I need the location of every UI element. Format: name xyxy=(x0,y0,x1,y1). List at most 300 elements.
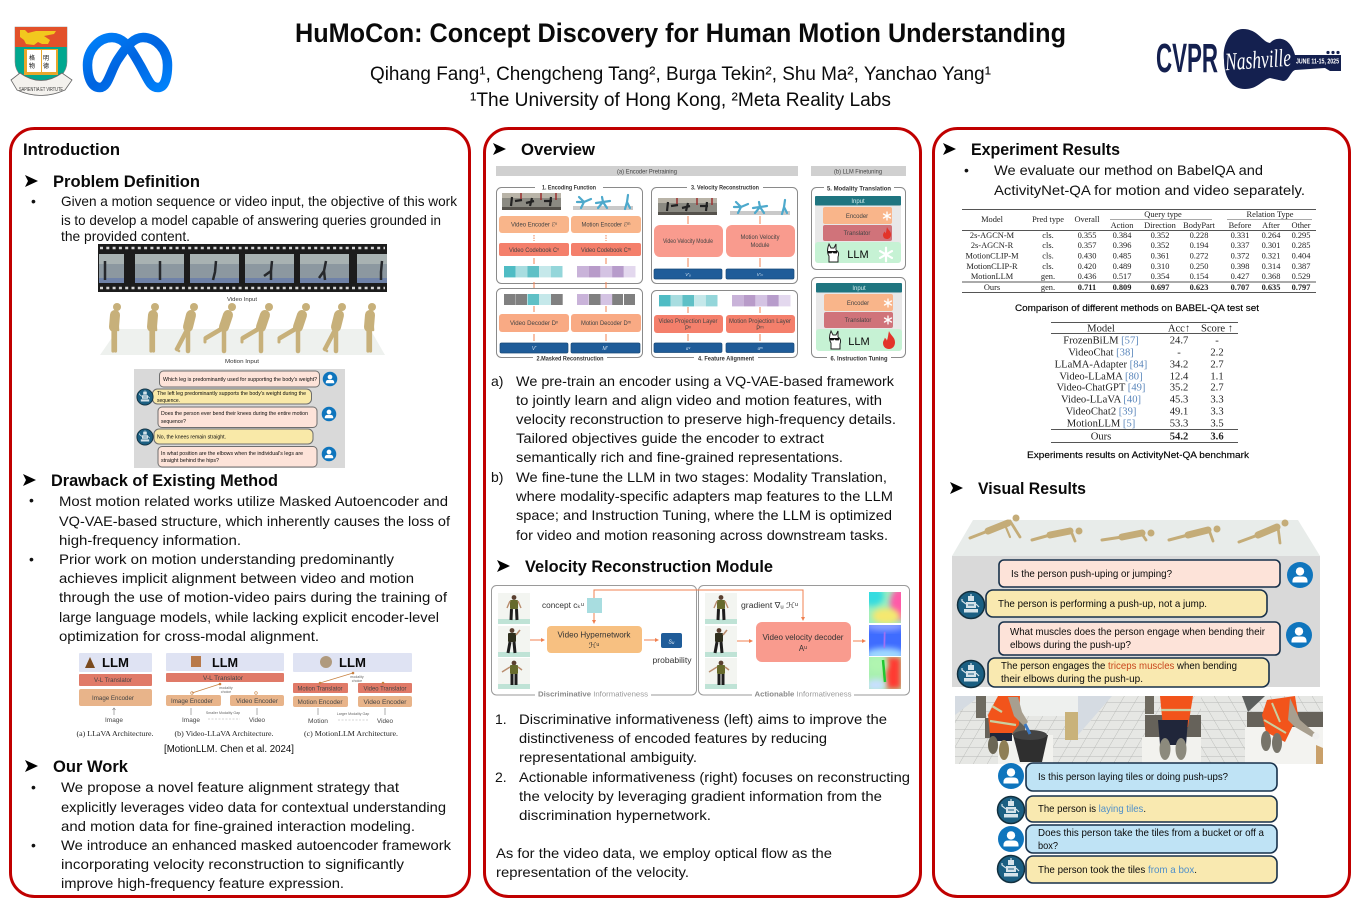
table: BABEL-QA comparison: 0.321 xyxy=(1262,252,1280,260)
table: BABEL-QA comparison: 0.623 xyxy=(1190,283,1208,292)
chat bubble: question 2: elbows during the push-up? xyxy=(1010,639,1131,651)
figure: architecture comparison xyxy=(76,653,412,738)
box: feature alignment xyxy=(652,290,798,362)
panel: overview xyxy=(484,128,920,896)
table: BABEL-QA comparison: Model xyxy=(981,215,1004,224)
text: our work: We propose a novel feature alignment strategy that xyxy=(61,779,399,795)
table: ActivityNet-QA results: 3.3 xyxy=(1210,394,1224,406)
heading: introduction: Introduction xyxy=(23,141,120,159)
text: our work: incorporating velocity reconstruction to significantly xyxy=(61,856,404,872)
table: BABEL-QA comparison: gen. xyxy=(1041,283,1055,292)
diagram: LLaVA architecture xyxy=(76,653,154,738)
text: problem definition: the provided content. xyxy=(61,228,190,244)
panel: introduction xyxy=(10,128,470,896)
table: BABEL-QA comparison: Query type xyxy=(1144,210,1182,219)
panel frame xyxy=(10,128,470,896)
table: ActivityNet-QA results: 2.7 xyxy=(1210,360,1224,370)
figure: motion Q&A chat: sequence. xyxy=(157,398,180,404)
text: drawbacks: optimization for cross-modal alignment. xyxy=(59,628,319,644)
box: feature alignment: Pᵐ xyxy=(756,326,764,332)
table: ActivityNet-QA results: 34.2 xyxy=(1170,360,1188,370)
icon: robot xyxy=(958,660,984,688)
box: instruction tuning: 6. Instruction Tuning xyxy=(830,356,888,362)
chat bubble: question 2: What muscles does the person engage when bending their xyxy=(1010,626,1265,638)
table: ActivityNet-QA results: 3.6 xyxy=(1210,432,1224,442)
table: ActivityNet-QA results: FrozenBiLM [57] xyxy=(1063,336,1139,346)
text: drawbacks: achieves implicit alignment between video and motion xyxy=(59,570,414,586)
header: LLM finetuning: (b) LLM Finetuning xyxy=(834,170,882,176)
table: ActivityNet-QA results: 24.7 xyxy=(1170,336,1188,346)
table: ActivityNet-QA results: Score ↑ xyxy=(1201,324,1233,334)
box: masked reconstruction: V′ xyxy=(532,346,537,352)
text: problem definition xyxy=(31,193,458,244)
header: LLM finetuning xyxy=(811,166,906,176)
diagram: Video-LLaVA architecture: modality xyxy=(219,686,233,690)
box: velocity reconstruction: 3. Velocity Reconstruction xyxy=(691,186,759,192)
diagram: MotionLLM architecture: choice xyxy=(352,679,362,683)
box: encoding function: Motion Encoder ℰᵐ xyxy=(582,222,631,228)
affiliations: ¹The University of Hong Kong, ²Meta Reality Labs xyxy=(470,90,891,111)
text: drawbacks: large language models, while lacking explicit encoder-level xyxy=(59,609,439,625)
text: our work: • xyxy=(31,837,36,853)
text: problem definition: • xyxy=(31,193,36,209)
text: drawbacks: high-frequency information. xyxy=(59,532,241,548)
table: BABEL-QA comparison: cls. xyxy=(1042,262,1054,271)
logo: HKU crest: 格 xyxy=(29,53,35,62)
box: modality translation xyxy=(812,185,906,270)
box: feature alignment: αᵛ xyxy=(686,346,690,351)
figure: video QA example xyxy=(955,696,1323,883)
diagram: MotionLLM architecture: Video Translator xyxy=(364,686,406,692)
box: feature alignment: Motion Projection Layer xyxy=(729,319,791,325)
diagram: Video-LLaVA architecture: LLM xyxy=(212,655,238,670)
box: velocity reconstruction: Module xyxy=(750,243,770,249)
table: BABEL-QA comparison: 0.529 xyxy=(1292,272,1310,281)
table: ActivityNet-QA results: LLaMA-Adapter [84] xyxy=(1055,360,1147,370)
diagram: LLaVA architecture: Image Encoder xyxy=(92,696,134,702)
table: BABEL-QA comparison: Other xyxy=(1291,221,1311,230)
diagram: LLaVA architecture: Image xyxy=(105,718,124,724)
text: numbered explanation: discrimination hypernetwork. xyxy=(519,807,711,823)
table: ActivityNet-QA results: MotionLLM [5] xyxy=(1067,418,1135,430)
diagram: MotionLLM architecture: Motion Translator xyxy=(298,686,342,692)
diagram: Video-LLaVA architecture: Image Encoder xyxy=(171,699,213,705)
box: actionable informativeness: Aᵘ xyxy=(799,644,807,653)
table: ActivityNet-QA results xyxy=(1051,322,1238,442)
box: feature alignment: Video Projection Layer xyxy=(658,319,718,325)
box: feature alignment: 4. Feature Alignment xyxy=(698,356,754,362)
box: masked reconstruction: 2.Masked Reconstruction xyxy=(536,356,604,362)
table: BABEL-QA comparison: 0.285 xyxy=(1292,241,1310,250)
text: overview b xyxy=(491,469,893,543)
header: encoder pretraining xyxy=(496,166,798,176)
box: actionable informativeness: Actionable Informativeness xyxy=(754,692,852,698)
text: numbered explanation: 1. xyxy=(495,711,507,727)
text: overview b: b) xyxy=(491,469,503,485)
authors: Qihang Fang¹, Chengcheng Tang², Burga Tekin², Shu Ma², Yanchao Yang¹ xyxy=(370,64,991,85)
text: our work: and motion data for fine-grained interaction modeling. xyxy=(61,818,415,834)
image: worker frame 1 xyxy=(955,696,1078,764)
label: video input: Video Input xyxy=(227,297,257,303)
icon: robot xyxy=(998,796,1024,824)
label: motion input: Motion Input xyxy=(225,359,259,365)
figure: motion Q&A chat xyxy=(134,369,345,468)
text: our work: improve high-frequency feature expression. xyxy=(61,875,344,891)
table: ActivityNet-QA results: 45.3 xyxy=(1170,394,1188,406)
text: overview b: for video and motion reasoning across downstream tasks. xyxy=(516,527,888,543)
table: ActivityNet-QA results: 12.4 xyxy=(1170,372,1189,382)
arrows: encoding to reconstruction xyxy=(534,282,606,292)
text: drawbacks: Most motion related works utilize Masked Autoencoder and xyxy=(59,493,448,509)
table: BABEL-QA comparison: 2s-AGCN-M xyxy=(970,231,1015,240)
table: BABEL-QA comparison: cls. xyxy=(1042,252,1054,260)
table: ActivityNet-QA results: - xyxy=(1177,348,1181,358)
box: velocity reconstruction: V′ₘ xyxy=(757,272,764,277)
heading: velocity reconstruction module: Velocity Reconstruction Module xyxy=(525,558,773,576)
text: numbered explanation: the velocity by leveraging gradient information from the xyxy=(519,788,882,804)
table: BABEL-QA comparison: 0.396 xyxy=(1113,241,1131,250)
chat bubble: question 1 xyxy=(1026,763,1277,791)
table: ActivityNet-QA results: 35.2 xyxy=(1170,382,1188,394)
diagram: MotionLLM architecture: LLM xyxy=(339,655,366,670)
table: BABEL-QA comparison: Action xyxy=(1111,221,1134,230)
icon: user xyxy=(1287,562,1313,588)
text: problem definition: is to develop a model capable of answering queries grounded in xyxy=(61,212,441,228)
box: masked reconstruction: M′ xyxy=(602,346,609,352)
table: ActivityNet-QA results: VideoChat [38] xyxy=(1068,348,1134,358)
figure: motion Q&A chat: sequence? xyxy=(161,419,186,425)
table: ActivityNet-QA results: VideoChat2 [39] xyxy=(1066,406,1136,418)
text: overview b: where modality-specific adapters map features to the LLM xyxy=(515,488,893,504)
diagram: Video-LLaVA architecture: Image xyxy=(182,718,201,724)
text: overview a: a) xyxy=(491,373,503,389)
table: BABEL-QA comparison: 0.228 xyxy=(1190,231,1208,240)
box: encoding function xyxy=(496,184,642,284)
image: worker frame 3 xyxy=(1201,696,1323,764)
figure: motion Q&A chat: The left leg predominantly supports the body's weight during the xyxy=(157,391,306,397)
box: instruction tuning: LLM xyxy=(848,336,870,348)
panel: experiment results xyxy=(934,128,1350,896)
table: ActivityNet-QA results: 3.3 xyxy=(1210,406,1224,418)
figure: motion Q&A chat: No, the knees remain straight. xyxy=(157,434,226,440)
chat bubble: question 2 xyxy=(999,622,1280,655)
text: overview a: Tailored objectives guide the encoder to extract xyxy=(516,430,824,446)
diagram: LLaVA architecture: (a) LLaVA Architecture. xyxy=(76,730,154,738)
heading: drawback of existing method: Drawback of Existing Method xyxy=(51,472,278,490)
table: BABEL-QA comparison: 0.361 xyxy=(1151,252,1169,260)
figure: video input film strip xyxy=(98,244,387,292)
table: BABEL-QA comparison: MotionCLIP-R xyxy=(966,262,1018,271)
figure: motion Q&A chat: Does the person ever bend their knees during the entire motion xyxy=(161,411,308,417)
table: ActivityNet-QA results: 2.7 xyxy=(1210,382,1224,394)
box: instruction tuning: Input xyxy=(852,286,866,292)
table: BABEL-QA comparison: 0.154 xyxy=(1190,272,1209,281)
heading: overview: Overview xyxy=(521,141,595,159)
box: modality translation: Translator xyxy=(844,231,870,237)
table: BABEL-QA comparison: 0.314 xyxy=(1262,262,1281,271)
figure: motion Q&A chat: Which leg is predominantly used for supporting the body's weight? xyxy=(163,377,317,383)
diagram: Video-LLaVA architecture: (b) Video-LLaVA Architecture. xyxy=(174,730,274,738)
box: encoding function: Video Codebook Cᵐ xyxy=(581,248,632,254)
chat bubble: question 1 xyxy=(999,560,1280,587)
table: ActivityNet-QA results: 54.2 xyxy=(1170,432,1188,442)
box: discriminative informativeness: Discriminative Informativeness xyxy=(538,692,649,698)
box: instruction tuning: Encoder xyxy=(847,301,869,307)
text: overview b: space; and Instruction Tuning, where the LLM is optimized xyxy=(516,507,892,523)
title: HuMoCon: Concept Discovery for Human Motion Understanding xyxy=(295,18,1066,48)
table: BABEL-QA comparison: 0.485 xyxy=(1113,252,1131,260)
text: evaluation summary: • xyxy=(964,162,969,178)
text: drawbacks: through the use of motion-video pairs during the training of xyxy=(59,589,447,605)
box: discriminative informativeness: ℋᵘ xyxy=(589,641,599,650)
diagram: Video-LLaVA architecture xyxy=(166,653,284,738)
logo: CVPR Nashville: JUNE 11-15, 2025 xyxy=(1296,58,1339,66)
diagram: Video-LLaVA architecture: Video xyxy=(249,718,266,724)
text: overview a: velocity reconstruction to preserve high-frequency details. xyxy=(516,411,896,427)
table: BABEL-QA comparison: 0.697 xyxy=(1151,283,1169,292)
text: overview a: semantically rich and fine-grained representations. xyxy=(516,449,843,465)
chat bubble: answer 2: The person engages the triceps muscles when bending xyxy=(1001,660,1237,672)
table: ActivityNet-QA results: - xyxy=(1215,336,1219,346)
heading: visual results: Visual Results xyxy=(978,480,1086,498)
table: BABEL-QA comparison: 0.352 xyxy=(1151,241,1169,250)
table: BABEL-QA comparison: 0.427 xyxy=(1231,272,1249,281)
image: optical flow 3 xyxy=(869,657,901,689)
logo: CVPR Nashville: Nashville xyxy=(1223,45,1292,76)
text: numbered explanation: distinctiveness of encoded features by reducing xyxy=(519,730,827,746)
image: push-up motion sequence xyxy=(952,514,1320,556)
box: masked reconstruction xyxy=(496,288,642,362)
table: BABEL-QA comparison: 0.797 xyxy=(1292,283,1310,292)
diagram: Video-LLaVA architecture: Video Encoder xyxy=(236,699,278,705)
table: BABEL-QA comparison: 0.436 xyxy=(1078,272,1096,281)
table: ActivityNet-QA results: 49.1 xyxy=(1170,406,1188,418)
text: drawbacks: • xyxy=(29,551,34,567)
box: actionable informativeness xyxy=(698,586,910,698)
table: BABEL-QA comparison: 0.372 xyxy=(1231,252,1249,260)
image: worker frame 2 xyxy=(1078,696,1201,764)
table: ActivityNet-QA results: Video-LLaMA [80] xyxy=(1059,372,1143,382)
text: numbered explanation xyxy=(495,711,910,823)
icon: user xyxy=(998,826,1024,852)
box: feature alignment: Pᵛ xyxy=(685,326,691,332)
text: drawbacks: Prior work on motion understanding predominantly xyxy=(59,551,394,567)
panel frame xyxy=(484,128,920,896)
icon: robot xyxy=(998,856,1024,882)
chat bubble: answer 1: The person is performing a push-up, not a jump. xyxy=(998,598,1207,610)
diagram: MotionLLM architecture xyxy=(293,653,412,738)
box: actionable informativeness: gradient ∇ᵤ ℋᵘ xyxy=(741,601,798,610)
diagram: MotionLLM architecture: modality xyxy=(350,675,364,679)
logo: HKU crest: 物 xyxy=(29,61,35,70)
box: discriminative informativeness: Video Hypernetwork xyxy=(558,630,631,640)
box: modality translation: LLM xyxy=(847,249,869,261)
caption: table 2: Experiments results on ActivityNet-QA benchmark xyxy=(1027,449,1249,460)
box: velocity reconstruction xyxy=(652,184,798,284)
text: problem definition: Given a motion sequence or video input, the objective of this work xyxy=(61,193,458,209)
table: ActivityNet-QA results: Video-LLaVA [40] xyxy=(1061,394,1141,406)
text: video data note xyxy=(496,845,832,880)
table: ActivityNet-QA results: 3.5 xyxy=(1210,418,1224,430)
image: optical flow 1 xyxy=(869,592,901,623)
table: BABEL-QA comparison: 0.635 xyxy=(1262,283,1280,292)
chat bubble: answer 2: The person took the tiles from a box. xyxy=(1038,864,1197,876)
diagram: MotionLLM architecture: Larger Modality Gap xyxy=(337,712,369,716)
figure: framework diagram xyxy=(496,166,906,362)
table: BABEL-QA comparison: Direction xyxy=(1144,221,1177,230)
table: BABEL-QA comparison: 0.368 xyxy=(1262,272,1280,281)
icon: user xyxy=(1286,622,1312,648)
table: BABEL-QA comparison: MotionCLIP-M xyxy=(965,252,1019,260)
table: BABEL-QA comparison: 0.384 xyxy=(1113,231,1132,240)
table: ActivityNet-QA results: 53.3 xyxy=(1170,418,1188,430)
logo: HKU crest: 德 xyxy=(43,61,49,70)
table: BABEL-QA comparison: 0.250 xyxy=(1190,262,1208,271)
diagram: MotionLLM architecture: Video Encoder xyxy=(364,700,406,706)
box: discriminative informativeness: sᵤ xyxy=(669,638,675,646)
text: evaluation summary: ActivityNet-QA for motion and video separately. xyxy=(994,182,1305,198)
table: BABEL-QA comparison: Pred type xyxy=(1032,215,1064,224)
table: BABEL-QA comparison: cls. xyxy=(1042,241,1054,250)
table: BABEL-QA comparison: 0.337 xyxy=(1231,241,1249,250)
logo: Meta xyxy=(88,38,168,88)
table: BABEL-QA comparison: 2s-AGCN-R xyxy=(971,241,1014,250)
box: velocity reconstruction: Motion Velocity xyxy=(740,235,780,241)
box: modality translation: Encoder xyxy=(846,214,868,220)
table: BABEL-QA comparison: Before xyxy=(1229,221,1252,230)
box: encoding function: 1. Encoding Function xyxy=(542,186,596,192)
chat bubble: answer 1 xyxy=(986,590,1267,617)
text: our work: • xyxy=(31,779,36,795)
arrow: concept to decoder xyxy=(594,590,805,621)
diagram: MotionLLM architecture: (c) MotionLLM Architecture. xyxy=(304,730,398,738)
citation: [MotionLLM. Chen et al. 2024] xyxy=(164,744,294,755)
table: BABEL-QA comparison: 0.489 xyxy=(1113,262,1131,271)
text: evaluation summary: We evaluate our method on BabelQA and xyxy=(994,162,1263,178)
text: video data note: As for the video data, we employ optical flow as the xyxy=(496,845,832,861)
text: overview a xyxy=(491,373,896,465)
heading: problem definition: Problem Definition xyxy=(53,173,200,191)
figure: motion input skeleton sequence xyxy=(100,303,385,355)
table: BABEL-QA comparison xyxy=(962,210,1316,292)
caption: table 1: Comparison of different methods on BABEL-QA test set xyxy=(1015,302,1259,313)
table: BABEL-QA comparison: 0.404 xyxy=(1292,252,1311,260)
text: our work xyxy=(31,779,452,891)
table: BABEL-QA comparison: BodyPart xyxy=(1183,221,1215,230)
text: evaluation summary xyxy=(964,162,1305,198)
box: encoding function: Video Encoder ℰᵛ xyxy=(511,222,557,228)
header: encoder pretraining: (a) Encoder Pretraining xyxy=(617,170,677,176)
diagram: MotionLLM architecture: Motion xyxy=(308,719,328,725)
table: ActivityNet-QA results: Video-ChatGPT [49] xyxy=(1057,382,1145,394)
box: actionable informativeness: Video velocity decoder xyxy=(762,633,844,642)
box: discriminative informativeness: concept cₖᵘ xyxy=(542,601,584,610)
text: numbered explanation: Discriminative informativeness (left) aims to improve the xyxy=(519,711,887,727)
chat bubble: answer 2: their elbows during the push-up. xyxy=(1001,673,1143,685)
figure: velocity reconstruction diagram xyxy=(492,586,910,698)
text: our work: explicitly leverages video data for contextual understanding xyxy=(61,799,446,815)
table: ActivityNet-QA results: Model xyxy=(1087,324,1115,334)
chat bubble: answer 2 xyxy=(988,658,1269,687)
text: overview a: We pre-train an encoder using a VQ-VAE-based framework xyxy=(516,373,895,389)
text: drawbacks: • xyxy=(29,492,34,508)
logo: HKU crest: SAPIENTIA ET VIRTUTE xyxy=(19,87,64,93)
table: BABEL-QA comparison: cls. xyxy=(1042,231,1054,240)
table: BABEL-QA comparison: After xyxy=(1262,221,1280,230)
icon: robot xyxy=(958,592,984,618)
table: BABEL-QA comparison: 0.264 xyxy=(1262,231,1281,240)
heading: our work: Our Work xyxy=(53,758,129,776)
chat bubble: question 1: Is this person laying tiles or doing push-ups? xyxy=(1038,771,1228,783)
box: encoding function: Video Codebook Cᵛ xyxy=(509,248,559,254)
table: BABEL-QA comparison: 0.310 xyxy=(1151,262,1169,271)
diagram: MotionLLM architecture: Motion Encoder xyxy=(298,700,342,706)
chat bubble: question 2: Does this person take the tiles from a bucket or off a xyxy=(1038,827,1264,839)
box: instruction tuning xyxy=(812,278,906,362)
text: numbered explanation: representational ambiguity. xyxy=(519,749,697,765)
chat bubble: answer 1: The person is laying tiles. xyxy=(1038,803,1146,815)
table: BABEL-QA comparison: 0.517 xyxy=(1113,272,1131,281)
diagram: LLaVA architecture: V-L Translator xyxy=(94,678,132,684)
text: numbered explanation: Actionable informativeness (right) focuses on reconstructing xyxy=(519,769,910,785)
chat background xyxy=(952,556,1320,687)
table: BABEL-QA comparison: 0.331 xyxy=(1231,231,1249,240)
table: BABEL-QA comparison: Relation Type xyxy=(1247,210,1294,219)
table: BABEL-QA comparison: 0.420 xyxy=(1078,262,1096,271)
icon: user xyxy=(998,763,1024,789)
table: BABEL-QA comparison: Ours xyxy=(984,283,1000,292)
diagram: Video-LLaVA architecture: Smaller Modality Gap xyxy=(206,711,240,715)
table: BABEL-QA comparison: 0.357 xyxy=(1078,241,1096,250)
table: BABEL-QA comparison: 0.295 xyxy=(1292,231,1310,240)
table: BABEL-QA comparison: 0.430 xyxy=(1078,252,1096,260)
diagram: Video-LLaVA architecture: V-L Translator xyxy=(203,676,243,682)
box: modality translation: Input xyxy=(851,199,865,205)
diagram: Video-LLaVA architecture: choice xyxy=(221,690,231,694)
table: BABEL-QA comparison: 0.707 xyxy=(1231,283,1249,292)
table: BABEL-QA comparison: 0.809 xyxy=(1113,283,1131,292)
box: masked reconstruction: Motion Decoder Dᵐ xyxy=(581,321,632,327)
table: BABEL-QA comparison: 0.301 xyxy=(1262,241,1280,250)
table: BABEL-QA comparison: 0.398 xyxy=(1231,262,1249,271)
table: BABEL-QA comparison: 0.194 xyxy=(1190,241,1209,250)
text: our work: We introduce an enhanced masked autoencoder framework xyxy=(61,837,452,853)
box: masked reconstruction: Video Decoder Dᵛ xyxy=(510,321,558,327)
logo: HKU crest xyxy=(11,27,72,96)
text: overview a: to jointly learn and align video and motion features, with xyxy=(516,392,882,408)
box: discriminative informativeness xyxy=(492,586,696,698)
chat bubble: answer 1 xyxy=(1026,796,1277,822)
diagram: MotionLLM architecture: Video xyxy=(377,719,394,725)
box: velocity reconstruction: V′ᵤ xyxy=(685,272,691,277)
diagram: LLaVA architecture: LLM xyxy=(102,655,129,670)
box: instruction tuning: Translator xyxy=(845,318,871,324)
text: overview b: We fine-tune the LLM in two stages: Modality Translation, xyxy=(516,469,887,485)
box: velocity reconstruction: Video Velocity Module xyxy=(663,239,714,245)
panel frame xyxy=(934,128,1350,896)
figure: motion Q&A chat: In what position are the elbows when the individual's legs are xyxy=(161,451,303,457)
table: BABEL-QA comparison: 0.387 xyxy=(1292,262,1310,271)
figure: motion Q&A chat: straight behind the hips? xyxy=(161,458,219,464)
table: ActivityNet-QA results: 1.1 xyxy=(1210,372,1224,382)
table: BABEL-QA comparison: gen. xyxy=(1041,272,1055,281)
box: feature alignment: αᵐ xyxy=(758,346,763,351)
image: optical flow 2 xyxy=(869,625,901,656)
chat bubble: question 2 xyxy=(1026,825,1277,853)
table: BABEL-QA comparison: 0.354 xyxy=(1151,272,1170,281)
heading: experiment results: Experiment Results xyxy=(971,141,1120,159)
table: BABEL-QA comparison: MotionLLM xyxy=(971,272,1014,281)
